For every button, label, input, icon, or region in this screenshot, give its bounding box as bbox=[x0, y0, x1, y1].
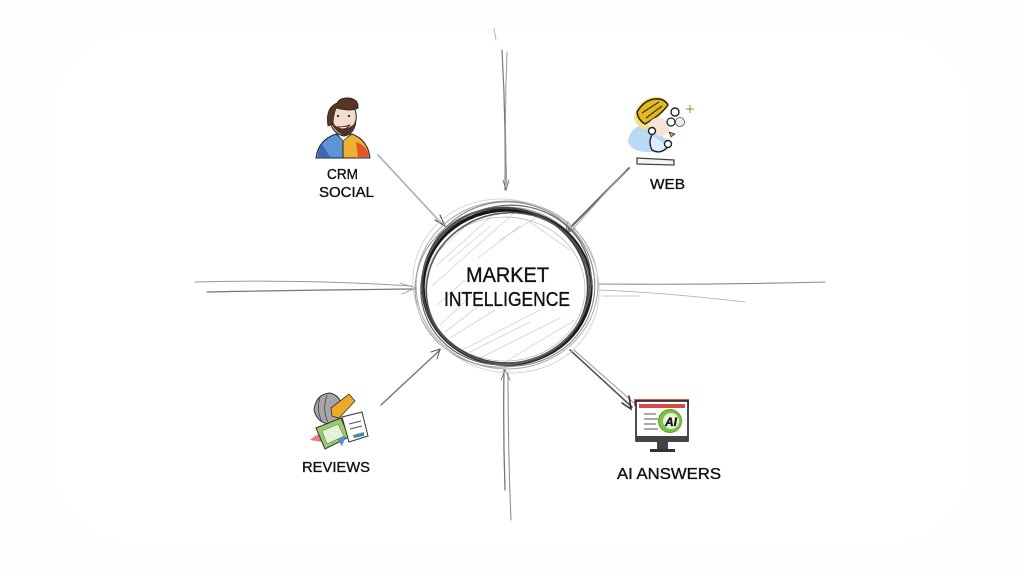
arrow: CRM social to hub bbox=[378, 155, 445, 226]
arrow: reviews to hub bbox=[381, 349, 440, 405]
sketch hatching bbox=[432, 212, 575, 362]
label: AI answers: AI ANSWERS bbox=[617, 466, 721, 483]
outer pencil rings bbox=[416, 201, 598, 369]
hub circle bbox=[388, 173, 624, 399]
label: CRM social bbox=[319, 167, 374, 201]
hub title bbox=[444, 264, 570, 311]
arrow: hub to AI answers bbox=[570, 350, 634, 409]
spoke: bottom bbox=[501, 370, 511, 520]
spoke: left bbox=[195, 281, 416, 294]
label: reviews: REVIEWS bbox=[302, 459, 370, 476]
label: web: WEB bbox=[650, 176, 685, 193]
icon: AI answers monitor: AI bbox=[664, 415, 678, 429]
hub title: INTELLIGENCE bbox=[444, 289, 570, 311]
label: CRM social: SOCIAL bbox=[319, 185, 374, 201]
spoke: top bbox=[494, 28, 509, 190]
icon: reviews bbox=[310, 393, 368, 449]
icon: AI answers monitor bbox=[634, 399, 689, 452]
label: CRM social: CRM bbox=[327, 167, 358, 183]
spoke: right bbox=[598, 282, 825, 302]
hub title: MARKET bbox=[466, 264, 549, 287]
icon: web bbox=[628, 97, 694, 165]
icon: CRM social person bbox=[316, 98, 370, 158]
main ink rings bbox=[423, 210, 591, 364]
arrow: web to hub bbox=[565, 168, 629, 233]
